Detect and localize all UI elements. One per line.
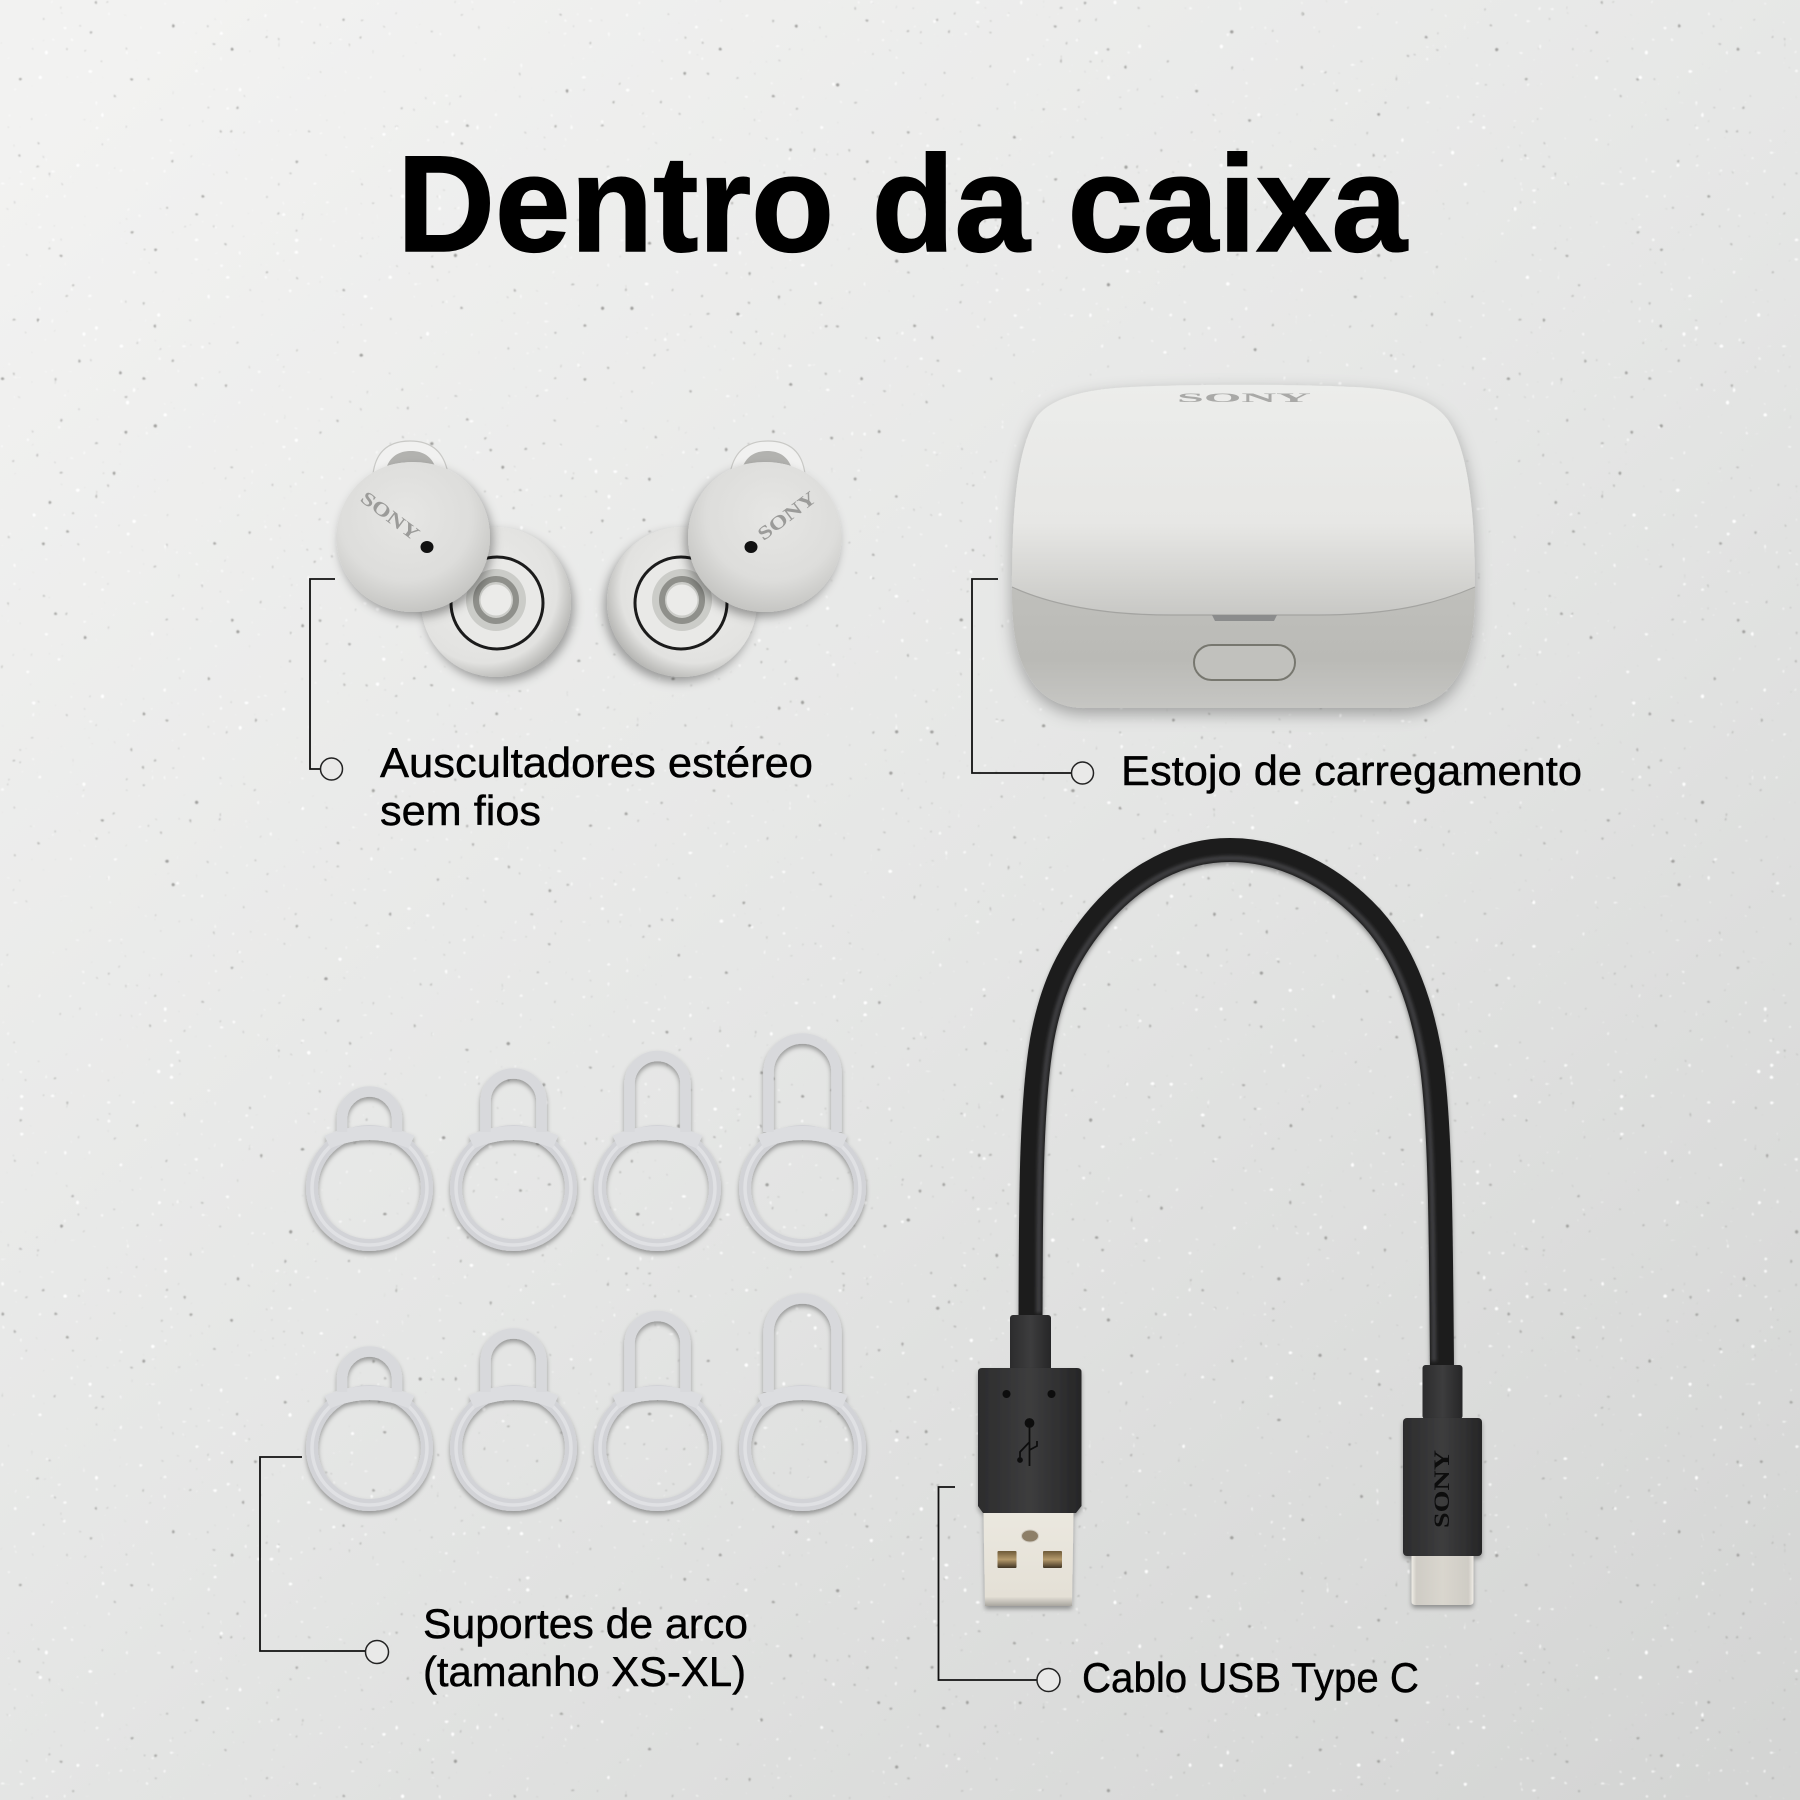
icon: right earbud [607,441,842,677]
label: earbuds [380,739,813,834]
title: Dentro da caixa [397,128,1409,281]
icon: left earbud: SONY [356,488,423,545]
icon: USB-C connector [1403,1418,1482,1605]
panel: USB cable [938,850,1482,1701]
panel: ear hangers [260,1038,860,1695]
label: USB cable: Cablo USB Type C [1082,1654,1419,1701]
icon: charging case: SONY [1177,390,1313,405]
label: ear hangers [423,1600,748,1695]
panel: earbuds [310,441,842,834]
label: ear hangers: (tamanho XS-XL) [423,1648,746,1695]
leader: charging case [972,579,1094,784]
label: ear hangers: Suportes de arco [423,1600,748,1647]
icon: right earbud: SONY [754,487,821,545]
icon: ear hangers row 1 [312,1038,860,1245]
panel: charging case [972,385,1582,794]
icon: USB-A connector [978,1368,1082,1606]
icon: charging case [1012,385,1475,708]
label: earbuds: sem fios [380,787,541,834]
leader: ear hangers [260,1457,388,1664]
label: earbuds: Auscultadores estéreo [380,739,813,786]
icon: ear hangers row 2 [312,1298,860,1505]
icon: USB-C connector: SONY [1429,1450,1454,1528]
icon: left earbud [336,441,571,677]
leader: USB cable [938,1487,1060,1692]
icon: USB symbol [1018,1419,1037,1466]
icon: USB cable [1010,850,1462,1419]
label: charging case: Estojo de carregamento [1121,747,1582,794]
leader: earbuds [310,579,342,780]
